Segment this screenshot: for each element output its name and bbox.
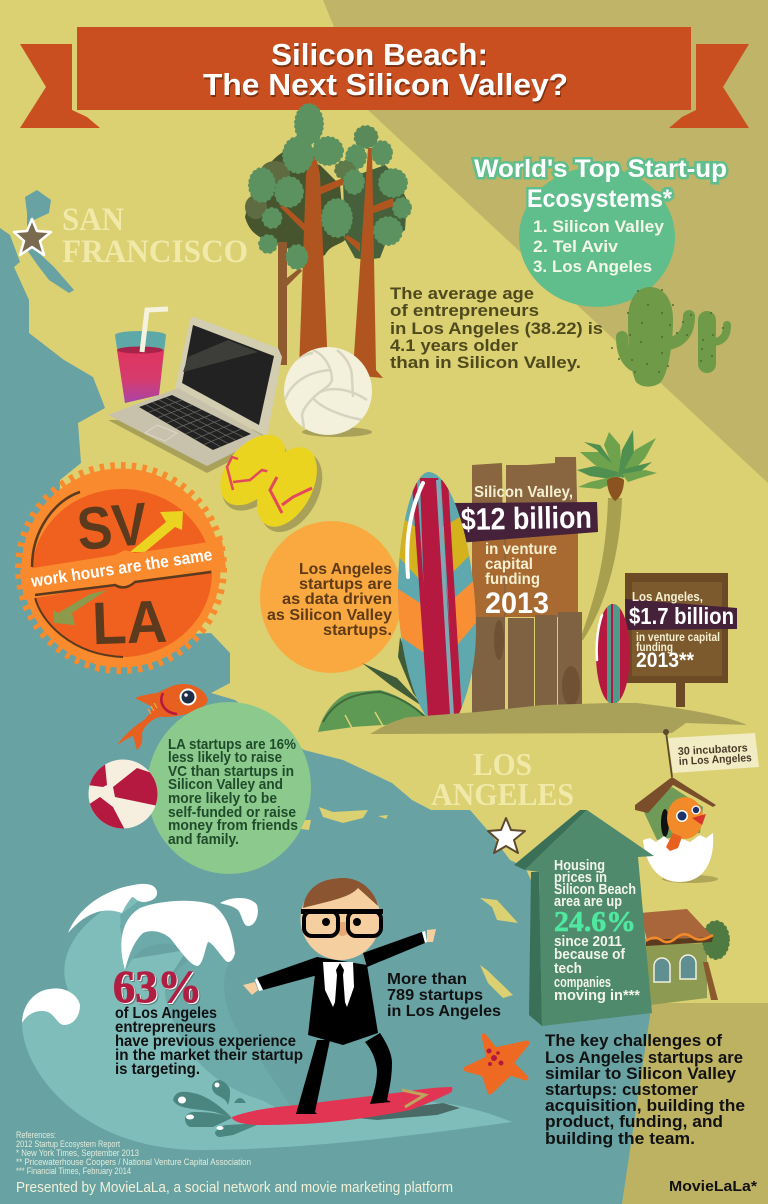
panel: housing prices arrow: Silicon Beach — [554, 881, 636, 898]
label: San Francisco: SAN — [62, 202, 124, 238]
title banner — [20, 27, 749, 128]
icon: wooden fence sign — [453, 457, 598, 713]
text: references: ** Pricewaterhouse Coopers / National Venture Capital Association — [16, 1157, 251, 1167]
icon: yellow arrow up — [130, 511, 183, 552]
panel: housing prices arrow: prices in — [554, 869, 607, 886]
callout: incubators flag: in Los Angeles — [679, 752, 752, 768]
text: average age: The average age — [390, 284, 534, 303]
icon: wooden fence sign: $12 billion — [461, 500, 592, 537]
map: islands — [301, 807, 518, 998]
icon: volleyball — [284, 347, 372, 437]
text: 789 startups: 789 startups — [387, 987, 483, 1004]
background: darker inland region — [323, 0, 768, 483]
text: key challenges: acquisition, building the — [545, 1096, 745, 1115]
icon: small sign: 2013** — [636, 649, 695, 672]
icon: laptop — [108, 316, 282, 473]
panel: less likely to raise VC: and family. — [168, 831, 239, 848]
man glasses — [301, 909, 383, 914]
stat: 63 percent: of Los Angeles — [115, 1005, 217, 1022]
text: key challenges: similar to Silicon Valley — [545, 1064, 737, 1083]
title banner: The Next Silicon Valley? — [203, 67, 568, 102]
badge: work hours are the same: work hours are the same — [29, 545, 214, 591]
man arms — [257, 932, 425, 990]
panel: less likely to raise VC: more likely to be — [168, 790, 277, 807]
label: Los Angeles: ANGELES — [431, 776, 574, 812]
icon: wave — [22, 884, 512, 1150]
text: references: References: — [16, 1130, 56, 1140]
text: key challenges: startups: customer — [545, 1080, 698, 1099]
stat: 63 percent — [113, 961, 303, 1078]
icon: small sign: Los Angeles, — [632, 589, 703, 604]
man legs — [296, 1033, 392, 1114]
panel: top start-up ecosystems: 3. Los Angeles — [533, 257, 652, 276]
icon: surfing man — [243, 878, 436, 1114]
icon: small sign: in venture capital — [636, 630, 720, 644]
label: Los Angeles: LOS — [473, 746, 532, 782]
panel: less likely to raise VC: Silicon Valley and — [168, 776, 283, 793]
panel: less likely to raise VC: LA startups are 16% — [168, 736, 296, 753]
panel: less likely to raise VC: less likely to raise — [168, 749, 282, 766]
icon: surfboard under man — [232, 1087, 460, 1125]
stat: 63 percent: 63% — [113, 961, 202, 1012]
panel: data driven: startups. — [323, 622, 392, 639]
panel: housing prices arrow: area are up — [554, 893, 622, 910]
icon: wooden fence sign: funding — [485, 571, 540, 588]
icon: drink — [115, 309, 168, 403]
icon: birdhouse with bird — [635, 777, 718, 883]
text: presented by: Presented by MovieLaLa, a social network and movie marketing platform — [16, 1179, 453, 1196]
panel: data driven — [260, 521, 402, 673]
panel: data driven: as Silicon Valley — [267, 607, 392, 624]
badge: work hours are the same: SV — [74, 490, 150, 563]
text: average age: than in Silicon Valley. — [390, 353, 581, 372]
text: key challenges — [545, 1031, 745, 1148]
icon: small surfboard — [595, 603, 631, 705]
icon: small sign — [625, 573, 737, 707]
panel: less likely to raise VC: VC than startups in — [168, 763, 294, 780]
banner tail left — [20, 44, 100, 128]
text: average age: of entrepreneurs — [390, 301, 539, 320]
icon: Los Angeles star — [488, 818, 525, 853]
icon: cactus — [611, 287, 727, 387]
text: key challenges: Los Angeles startups are — [545, 1048, 743, 1067]
label: Los Angeles — [431, 746, 574, 812]
icon: small sign: funding — [636, 640, 673, 654]
text: key challenges: The key challenges of — [545, 1031, 722, 1050]
icon: sand mound — [370, 703, 747, 734]
callout: incubators flag: 30 incubators — [678, 742, 748, 758]
panel: housing prices arrow: moving in*** — [554, 987, 640, 1004]
text: average age: in Los Angeles (38.22) is — [390, 319, 603, 338]
stat: 63 percent: is targeting. — [115, 1061, 200, 1078]
text: 789 startups — [387, 971, 501, 1020]
stat: 63 percent: entrepreneurs — [115, 1019, 216, 1036]
panel: housing prices arrow: since 2011 — [554, 933, 622, 950]
man suit — [308, 957, 378, 1045]
background: darker southern land — [622, 1003, 768, 1204]
icon: starfish — [466, 1036, 527, 1092]
icon: wooden fence sign: capital — [485, 556, 533, 573]
icon: large surfboard — [398, 472, 476, 716]
panel: less likely to raise VC: self-funded or raise — [168, 804, 296, 821]
icon: green arrow down — [53, 590, 107, 625]
icon: flip flops — [207, 423, 335, 543]
icon: wooden fence sign: Silicon Valley, — [474, 484, 573, 501]
label: San Francisco: FRANCISCO — [62, 234, 248, 270]
stat: 63 percent: have previous experience — [115, 1033, 296, 1050]
text: key challenges: building the team. — [545, 1129, 695, 1148]
icon: beach plants — [318, 637, 427, 732]
stat: 63 percent: in the market their startup — [115, 1047, 303, 1064]
panel: housing prices arrow: 24.6% — [554, 906, 636, 938]
banner tail right — [669, 44, 749, 128]
text: average age: 4.1 years older — [390, 336, 518, 355]
panel: data driven: startups are — [299, 576, 392, 593]
icon: wooden fence sign: in venture — [485, 541, 557, 558]
text: references: *** Financial Times, February 2014 — [16, 1166, 131, 1176]
badge: work hours are the same — [18, 466, 226, 670]
panel: less likely to raise VC: money from friends — [168, 817, 298, 834]
panel: less likely to raise VC — [147, 702, 311, 874]
icon: wooden fence sign: 2013 — [485, 587, 549, 620]
man shirt and tie — [323, 962, 354, 1007]
icon: palm tree — [577, 430, 657, 640]
panel: housing prices arrow: tech — [554, 960, 582, 977]
text: key challenges: product, funding, and — [545, 1112, 723, 1131]
icon: beach ball — [88, 760, 158, 830]
icon: fish — [117, 684, 208, 750]
badge: work hours are the same: LA — [91, 588, 168, 657]
map: San Francisco bay — [25, 190, 74, 293]
text: 789 startups: in Los Angeles — [387, 1003, 501, 1020]
wave foam — [22, 884, 258, 1025]
panel: top start-up ecosystems: World's Top Start-up — [474, 155, 727, 183]
text: references — [16, 1130, 251, 1176]
panel: top start-up ecosystems — [474, 155, 727, 307]
panel: housing prices arrow: Housing — [554, 857, 605, 874]
label: San Francisco — [62, 202, 248, 270]
panel: top start-up ecosystems: 2. Tel Aviv — [533, 237, 619, 256]
icon: San Francisco star — [14, 219, 51, 255]
text: 789 startups: More than — [387, 971, 467, 988]
icon: house — [640, 909, 727, 1005]
logo: MovieLaLa: MovieLaLa* — [669, 1178, 757, 1195]
panel: data driven: Los Angeles — [299, 561, 392, 578]
panel: top start-up ecosystems: Ecosystems* — [527, 185, 672, 213]
icon: redwood trees — [245, 106, 409, 378]
panel: housing prices arrow: because of — [554, 946, 626, 963]
wave splash — [173, 1080, 262, 1137]
callout: incubators flag — [663, 729, 759, 777]
title banner: Silicon Beach: — [271, 37, 488, 72]
man head — [300, 878, 380, 960]
text: average age — [390, 284, 603, 372]
panel: data driven: as data driven — [282, 591, 392, 608]
text: references: * New York Times, September 2013 — [16, 1148, 139, 1158]
map: ocean and coastline — [0, 190, 652, 1204]
panel: top start-up ecosystems: 1. Silicon Valley — [533, 217, 665, 236]
panel: housing prices arrow: companies — [554, 974, 611, 991]
panel: housing prices arrow — [514, 810, 654, 1026]
text: references: 2012 Startup Ecosystem Report — [16, 1139, 120, 1149]
icon: small sign: $1.7 billion — [629, 603, 734, 629]
